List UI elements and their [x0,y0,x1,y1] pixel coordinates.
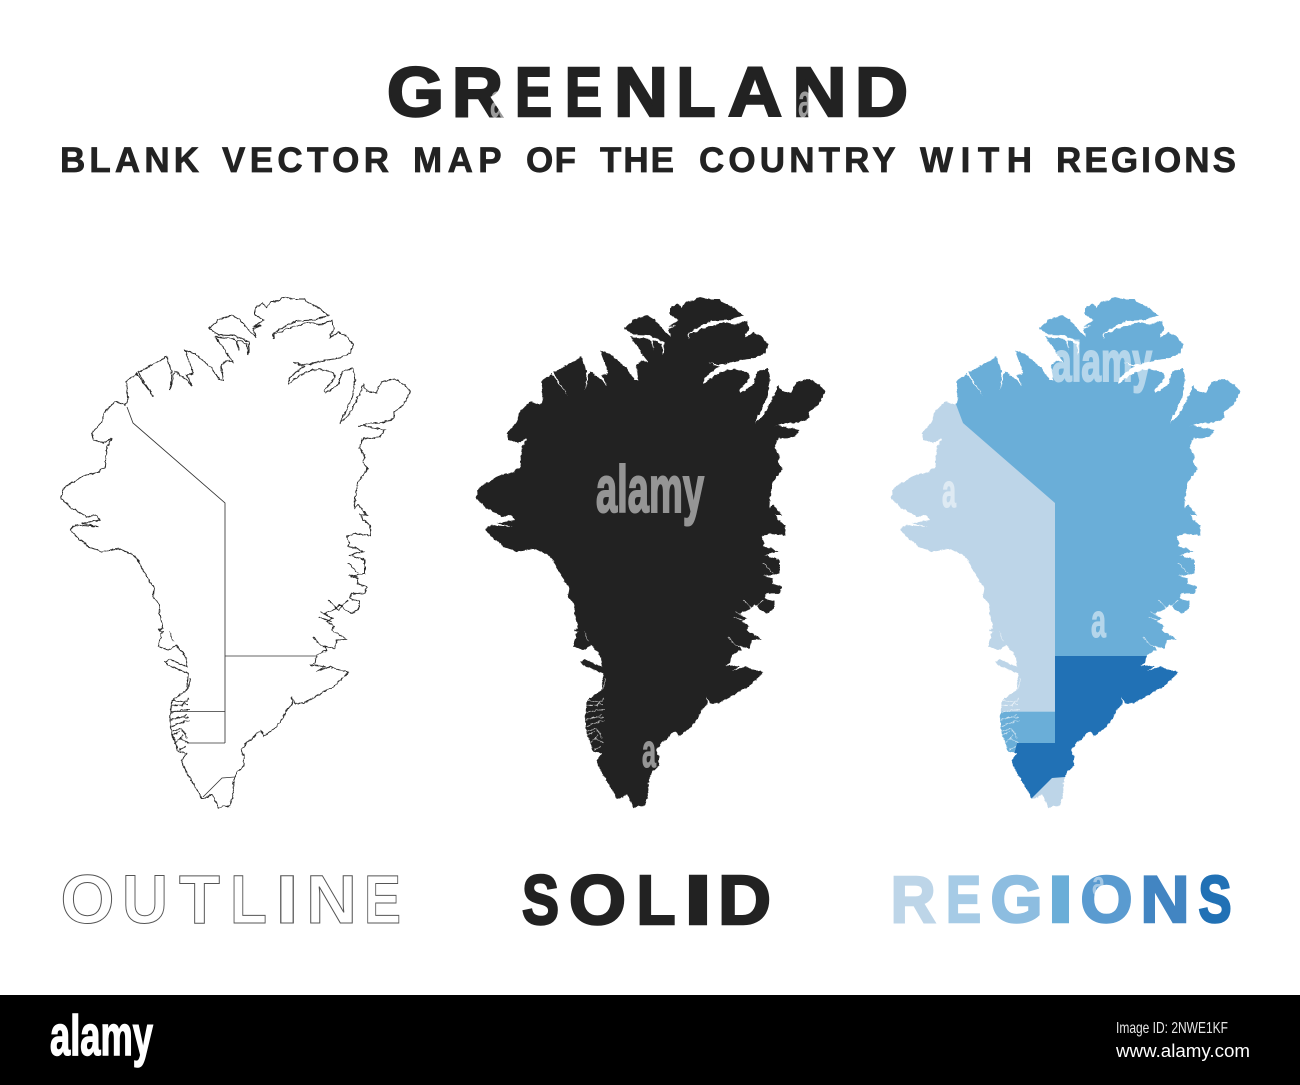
footer url: www.alamy.com [1115,1041,1250,1061]
watermark: a on regions O: a [1092,865,1106,903]
label: regions: R [891,862,936,936]
label: solid: I [684,861,712,939]
subtitle: OF [526,141,576,180]
region: west [890,401,1055,712]
label: outline: U [122,861,168,938]
watermark: a on regions west: a [942,464,956,517]
watermark: a on title N: a [798,74,812,127]
watermark: a on title R: a [490,74,504,127]
footer logo: alamy [50,1004,153,1068]
watermark: a on solid map: a [642,724,656,777]
label: outline: O [60,861,114,938]
title: A [728,53,782,131]
map: regions [890,297,1240,808]
subtitle: MAP [413,141,501,180]
label: outline: E [364,861,401,938]
label: regions: S [1198,862,1232,936]
watermark: alamy on solid map: alamy [596,452,704,526]
label: regions: O [1080,862,1132,936]
subtitle: VECTOR [222,141,389,180]
subtitle: WITH [920,141,1032,180]
region: south-east [1011,656,1178,798]
region: southern tip [1032,777,1065,808]
footer image id: Image ID: 2NWE1KF [1116,1020,1228,1037]
subtitle: BLANK [60,141,199,180]
label: regions: N [1140,862,1190,936]
subtitle: THE [600,141,674,180]
label: outline: N [306,861,357,938]
region: south-west band [868,712,1055,757]
label: solid: O [569,861,626,939]
subtitle: COUNTRY [699,141,895,180]
label: solid: L [636,861,676,939]
label: regions: I [1048,862,1074,936]
watermark: alamy on regions map: alamy [1052,330,1152,393]
label: outline: L [230,861,267,938]
region: north-east [956,297,1240,656]
label: regions: G [990,862,1042,936]
label: solid: D [718,861,771,939]
map: outline [60,296,411,809]
title: N [614,53,668,131]
map: solid [476,298,825,808]
label: outline: I [275,861,299,938]
subtitle: REGIONS [1056,141,1236,180]
title: L [676,53,716,131]
footer bar [0,995,1300,1085]
label: solid: S [522,861,559,939]
title: N [792,53,846,131]
title: E [515,53,552,131]
label: outline: T [179,861,220,938]
label: regions: E [946,862,981,936]
title: D [855,53,908,131]
watermark: a on regions east: a [1091,594,1106,647]
title: E [565,53,602,131]
title: G [387,53,444,131]
title: R [452,53,503,131]
